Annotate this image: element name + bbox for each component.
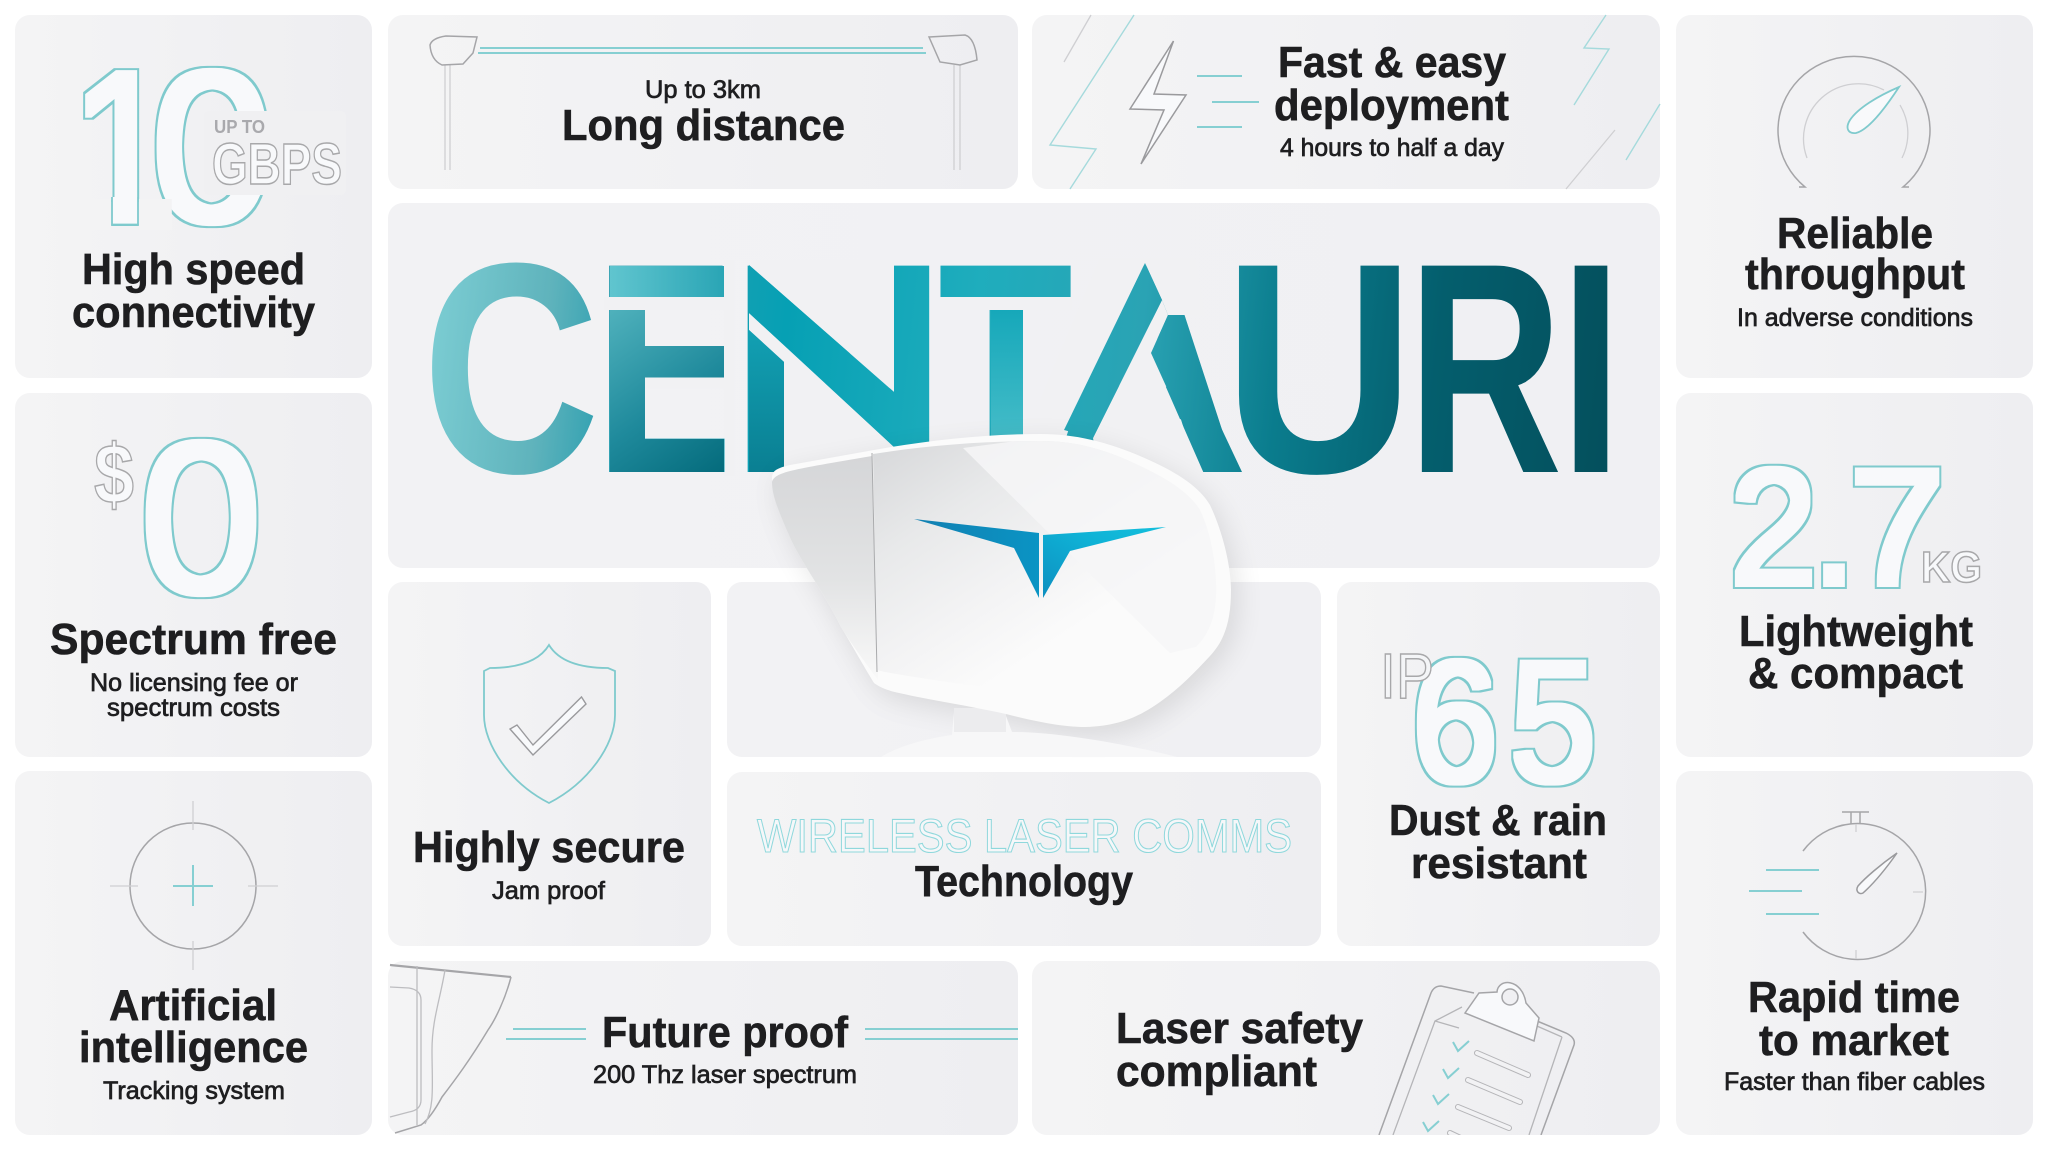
heading: reliable throughput: throughput [1745, 250, 1965, 299]
logo wordmark: R [1408, 200, 1562, 536]
big number 2.7: . [1811, 435, 1857, 619]
heading: rapid time to market: Rapid time [1748, 973, 1960, 1022]
logo mark on terminal [914, 519, 1166, 598]
heading: highly secure: Highly secure [413, 823, 685, 872]
panel: fast and easy deployment [1032, 15, 1660, 189]
subtext: faster than fiber cables: Faster than fiber cables [1724, 1068, 1985, 1096]
heading: lightweight and compact: Lightweight [1739, 607, 1973, 656]
logo wordmark: T [938, 200, 1073, 536]
heading: future proof: Future proof [602, 1008, 848, 1057]
subtext: in adverse conditions: In adverse conditions [1737, 304, 1973, 332]
panel: laser safety compliant [1032, 961, 1660, 1152]
panel: rapid time to market [1676, 771, 2033, 1135]
heading: fast and easy deployment: deployment [1274, 81, 1509, 130]
logo wordmark: C [422, 200, 600, 536]
unit backing [204, 111, 346, 195]
logo wordmark: E [595, 200, 735, 536]
outlined title: WIRELESS LASER COMMS [757, 809, 1292, 862]
heading: artificial intelligence: Artificial [109, 981, 277, 1030]
panel: reliable throughput [1676, 15, 2033, 378]
subtext: up to 3km: Up to 3km [645, 76, 761, 104]
icon: target reticle [110, 801, 278, 970]
subtext: jam proof: Jam proof [492, 877, 605, 905]
logo wordmark: U [1223, 200, 1415, 536]
subtext: 4 hours to half a day: 4 hours to half a day [1280, 134, 1504, 162]
panel: high speed connectivity [15, 15, 372, 378]
ip label: IP [1380, 640, 1434, 712]
numeral one foot trim [74, 197, 172, 230]
panel: centauri logo [388, 200, 1660, 568]
icon: laser link between two terminals [430, 35, 977, 170]
big number 2.7: 2 [1730, 435, 1817, 619]
icon: clipboard [1379, 983, 1574, 1152]
heading: high speed connectivity: High speed [82, 245, 305, 294]
big number 2.7: 7 [1849, 435, 1945, 619]
panel: long distance [388, 15, 1018, 189]
panel: wireless laser comms technology [727, 772, 1321, 946]
big number 10: 0 [151, 26, 273, 267]
logo wordmark: A [1048, 200, 1243, 536]
logo wordmark: N [727, 200, 950, 536]
kg label: KG [1921, 543, 1982, 592]
heading: long distance: Long distance [562, 101, 845, 150]
big number 65: 5 [1510, 626, 1596, 818]
icon: speed gauge [1778, 56, 1930, 187]
panel: lightweight and compact [1676, 393, 2033, 757]
heading: lightweight and compact: & compact [1748, 649, 1963, 698]
heading: laser safety compliant: compliant [1116, 1047, 1317, 1096]
logo wordmark: I [1560, 200, 1622, 536]
heading: laser safety compliant: Laser safety [1116, 1004, 1364, 1053]
subtext: no licensing fee: spectrum costs [107, 694, 280, 722]
icon: shield with check [484, 645, 615, 803]
subtext: tracking system: Tracking system [103, 1077, 285, 1105]
heading: dust and rain resistant: Dust & rain [1389, 796, 1607, 845]
panel: product photo backdrop [727, 582, 1321, 757]
logo letter refinements [610, 263, 1242, 472]
beams left [506, 1029, 586, 1039]
heading: artificial intelligence: intelligence [79, 1023, 308, 1072]
big zero: 0 [140, 397, 262, 638]
panel: artificial intelligence [15, 771, 372, 1135]
icon: terminal side view [390, 965, 511, 1133]
heading: dust and rain resistant: resistant [1411, 839, 1587, 888]
panel: dust and rain resistant [1337, 582, 1660, 946]
big number 65: 6 [1412, 626, 1498, 818]
heading: reliable throughput: Reliable [1777, 209, 1933, 258]
heading: fast and easy deployment: Fast & easy [1278, 38, 1506, 87]
big number 10: 1 [70, 26, 175, 267]
panel: future proof [388, 961, 1018, 1135]
background lightning lines [1050, 15, 1660, 189]
up to label: UP TO [214, 117, 265, 137]
heading: rapid time to market: to market [1759, 1016, 1949, 1065]
beams right [865, 1029, 1018, 1039]
dollar sign: $ [94, 427, 134, 521]
logo letter cuts [604, 258, 1205, 476]
product photo: centauri terminal [772, 430, 1237, 757]
panel: highly secure [388, 582, 711, 946]
panel: spectrum free [15, 393, 372, 757]
icon: lightning bolt [1130, 41, 1259, 164]
heading: spectrum free: Spectrum free [50, 615, 337, 664]
heading: technology: Technology [915, 857, 1133, 906]
icon: stopwatch [1749, 812, 1926, 959]
subtext: no licensing fee: No licensing fee or [90, 669, 298, 697]
gbps label: GBPS [212, 132, 342, 197]
heading: high speed connectivity: connectivity [72, 288, 315, 337]
subtext: 200 thz laser spectrum: 200 Thz laser spectrum [593, 1061, 857, 1089]
